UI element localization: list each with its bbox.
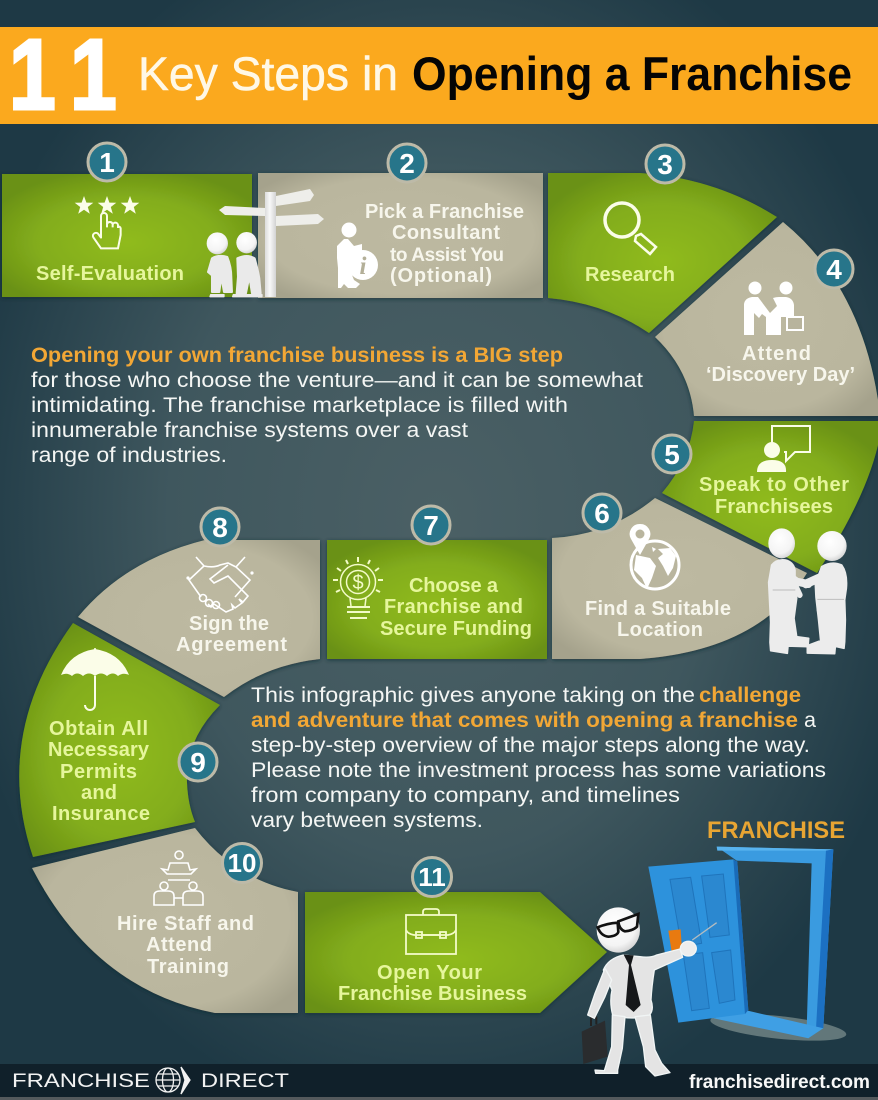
label [338,962,527,1005]
label [365,201,524,287]
text block: overview: This infographic gives anyone taking on the [251,684,695,707]
label [380,575,532,640]
logo [12,1067,289,1094]
icon: person with info [337,222,378,288]
text block: overview [251,684,826,832]
text block: intro: intimidating. The franchise marketplace is filled with [31,394,568,417]
icon: handshake [187,557,253,612]
label: Self-Evaluation [36,263,184,285]
icon: two people shaking hands [744,282,803,335]
title number: 1 [70,18,117,131]
label: Pick a Franchise [365,201,524,223]
logo: DIRECT [201,1071,289,1092]
icon: light bulb with dollar: $ [352,572,364,594]
label: Research [585,264,675,286]
illustration: signpost with two figures [207,189,324,297]
label: and [81,782,117,804]
label: Franchisees [715,496,833,518]
text block: overview: challenge [699,684,801,707]
text block: overview: from company to company, and timelines [251,784,680,807]
door label: FRANCHISE [707,817,845,844]
label: Consultant [392,222,500,244]
label: Open Your [377,962,482,984]
step number badges: 6 [594,498,610,529]
panel: step 2 consultant [258,173,543,298]
illustration: two figures shaking hands [768,528,847,654]
left figure [769,560,809,653]
panel: step 1 self-evaluation [2,174,252,297]
icon: umbrella [61,648,129,710]
label: to Assist You [390,245,504,266]
label: Secure Funding [380,618,532,640]
label [176,613,287,656]
text block: overview: Please note the investment process has some variations [251,759,826,782]
step number badges [88,143,853,896]
label: (Optional) [390,265,492,287]
step number badges: 4 [826,254,842,285]
icon: light bulb with dollar [333,557,383,618]
label [117,913,254,978]
title banner [0,18,878,131]
briefcase [582,1018,608,1064]
label: Franchise Business [338,983,527,1005]
label: Location [617,619,703,641]
panel: step 5 speak to franchisees [662,421,878,573]
illustration: businessman pointing at door [582,907,717,1076]
label: Attend [742,343,811,365]
panel: step 9 permits and insurance [19,623,220,857]
label [48,718,150,825]
panel: step 11 open your business arrow [305,892,607,1013]
footer bar [0,1064,878,1100]
step number badges: 7 [423,510,439,541]
label: Choose a [409,575,499,597]
tie [624,955,641,1012]
panel: step 4 discovery day [655,222,878,416]
label [585,598,731,641]
logo: FRANCHISE [12,1071,150,1092]
step number badges: 9 [190,747,206,778]
glasses [598,914,638,937]
text block: intro: Opening your own franchise business is a BIG step [31,344,563,367]
text block: overview: vary between systems. [251,809,483,832]
label: Find a Suitable [585,598,731,620]
pointer [692,923,717,940]
label: Permits [60,761,137,783]
step number badges: 1 [99,147,115,178]
text block: intro: innumerable franchise systems over a vast [31,419,468,442]
text block: intro: range of industries. [31,444,227,467]
label: ‘Discovery Day’ [706,364,855,386]
step number badges: 10 [228,848,256,878]
icon: speaking person [757,426,810,472]
panel: step 8 agreement [78,540,320,697]
label: Franchise and [384,596,523,618]
icon: person with info: i [360,253,367,280]
label: Hire Staff and [117,913,254,935]
figures [207,232,262,297]
label: Training [147,956,229,978]
step number badges: 3 [657,149,673,180]
panel: step 3 research [548,173,777,333]
text block: overview: a [804,709,816,732]
step number badges: 11 [418,862,446,892]
icon: globe and pin [630,524,679,589]
text block: intro [31,344,643,467]
title number [9,18,117,131]
icon: globe [156,1067,190,1094]
title light part: Key Steps in [138,47,398,100]
text block: intro: for those who choose the venture—and it can be somewhat [31,369,643,392]
head [597,907,640,953]
title dark part: Opening a Franchise [412,47,852,100]
panel: step 6 location [552,498,807,659]
label: Attend [146,934,212,956]
website: franchisedirect.com [689,1072,870,1093]
label: Insurance [52,803,150,825]
label [699,474,849,518]
step number badges: 5 [664,439,680,470]
illustration: blue door [648,847,847,1046]
body [588,941,696,1076]
label: Sign the [189,613,269,635]
title number: 1 [9,18,56,131]
text block: overview: and adventure that comes with opening a franchise [251,709,798,732]
icon: magnifier [605,203,656,254]
label: Agreement [176,634,287,656]
icon: seminar group [154,851,203,905]
label [706,343,855,386]
icon: stars and pointing hand [75,196,139,248]
step number badges: 2 [399,148,415,179]
label: Necessary [48,739,150,761]
text block: overview: step-by-step overview of the major steps along the way. [251,734,810,757]
label: Obtain All [49,718,148,740]
signpost [219,189,324,297]
right figure [807,563,847,654]
panel: step 7 funding [327,540,547,659]
step number badges: 8 [212,512,228,543]
panel: step 10 staff and training [32,828,298,1013]
label: Speak to Other [699,474,849,496]
icon: briefcase [406,909,456,954]
